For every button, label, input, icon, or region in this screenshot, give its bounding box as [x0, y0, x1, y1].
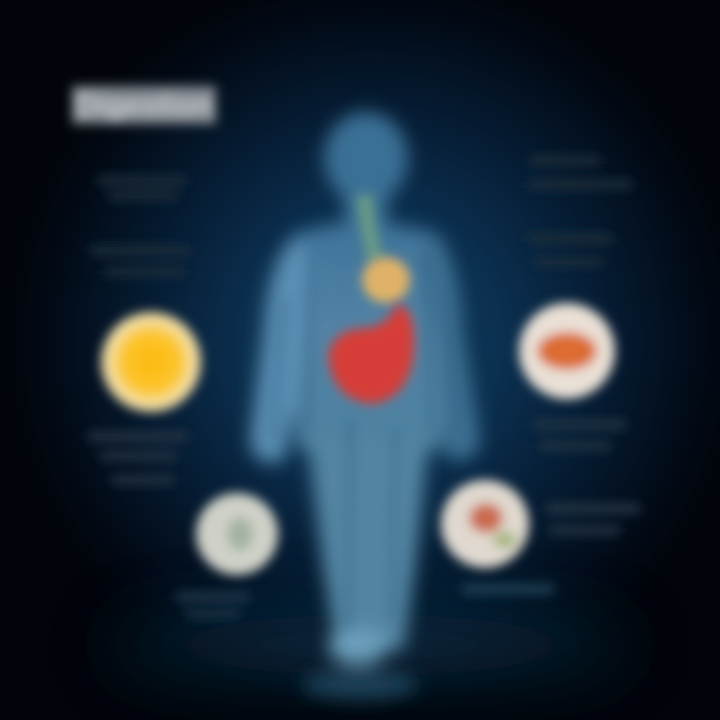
icon: orange plate	[519, 303, 615, 399]
feet	[302, 669, 418, 699]
ankles	[328, 628, 388, 664]
human figure	[250, 112, 480, 699]
text block: right middle	[528, 234, 612, 266]
left text blocks	[88, 176, 250, 618]
icon: pale grey circle	[196, 493, 278, 575]
stomach organ	[328, 304, 414, 404]
title: Digestion	[76, 89, 212, 122]
text block: left lower	[88, 432, 188, 484]
right text blocks	[462, 156, 640, 594]
text block: bottom left	[176, 592, 250, 618]
icon: food circle	[441, 480, 529, 568]
floor glow	[110, 613, 630, 677]
text block: right upper	[528, 156, 632, 189]
text block: left middle	[90, 246, 190, 276]
text block: right lower	[534, 420, 626, 450]
torso	[284, 223, 454, 450]
body texture	[272, 250, 458, 630]
icon: yellow circle	[101, 312, 201, 412]
liver organ	[362, 257, 410, 303]
text block: bottom center right	[462, 584, 554, 594]
text block: left upper	[98, 176, 186, 200]
head	[324, 112, 408, 204]
left arm	[250, 235, 312, 462]
legs	[308, 440, 428, 650]
right arm	[420, 235, 480, 460]
neck	[345, 190, 387, 234]
esophagus	[364, 195, 376, 262]
text block: bottom right	[546, 504, 640, 534]
